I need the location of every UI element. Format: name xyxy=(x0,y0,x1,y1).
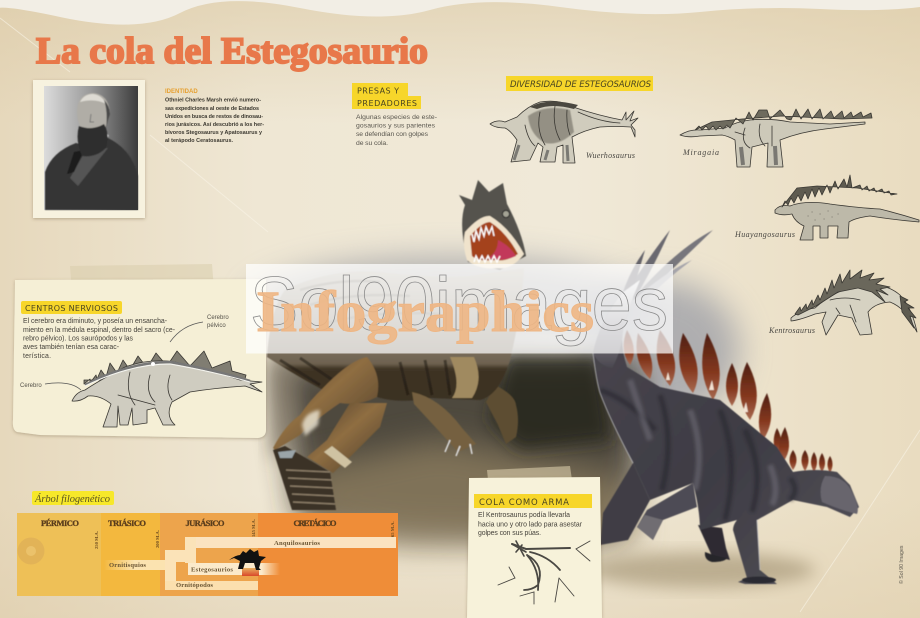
date labels xyxy=(94,519,395,549)
date labels: 250 M.A. xyxy=(94,531,99,549)
far hind leg xyxy=(600,463,650,545)
sketch: Wuerhosaurus xyxy=(490,101,638,163)
theropod far arm xyxy=(486,385,518,444)
name: Miragaia: Miragaia xyxy=(682,148,719,157)
label: cerebro: Cerebro xyxy=(20,383,42,389)
text block: kentrosaurus tail: El Kentrosaurus podía llevarla xyxy=(478,512,570,519)
name: Kentrosaurus: Kentrosaurus xyxy=(768,326,815,335)
panel: cola como arma xyxy=(467,477,602,618)
heading: diversidad de estegosaurios: DIVERSIDAD DE ESTEGOSAURIOS xyxy=(510,80,652,90)
branch labels xyxy=(109,540,320,589)
text block: cerebro: miento en la médula espinal, dentro del sacro (ce- xyxy=(23,327,175,334)
sketch: Stegosaurus with brain labels xyxy=(20,315,262,427)
name: Wuerhosaurus: Wuerhosaurus xyxy=(586,151,635,160)
branch labels: Estegosaurios xyxy=(191,566,233,574)
text block: kentrosaurus tail: golpes con sus púas. xyxy=(478,530,541,537)
tree branches xyxy=(104,537,396,590)
text block: cerebro: rebro pélvico). Los saurópodos y las xyxy=(23,336,134,342)
watermark: Sol90images and Infographics: Infographics xyxy=(256,279,594,344)
date labels: 65 M.A. xyxy=(390,521,395,537)
text block: cerebro: terística. xyxy=(23,353,51,360)
heading: centros nerviosos: CENTROS NERVIOSOS xyxy=(25,304,118,313)
heading: presas y predadores: PREDADORES xyxy=(357,99,417,108)
sketch: tail movement xyxy=(498,541,590,604)
heading: arbol filogenetico: Árbol filogenético xyxy=(34,493,110,505)
illustration: armoured stegosaur xyxy=(593,230,859,584)
period labels xyxy=(41,518,337,528)
portrait photo xyxy=(44,86,138,210)
tail spikes xyxy=(622,230,713,304)
chart: phylogenetic tree timeline xyxy=(17,513,398,596)
heading: presas y predadores: PRESAS Y xyxy=(357,86,399,96)
text block: cerebro: aves también tenían esa carac- xyxy=(23,344,119,351)
text block: presas y predadores: se defendían con golpes xyxy=(356,131,429,138)
illustration: theropod predator xyxy=(267,180,526,510)
branch labels: Anquilosaurios xyxy=(274,540,320,547)
branch labels: Ornitisquios xyxy=(109,562,146,569)
text block: identidad: bívoros Stegosaurus y Apatosaurus y xyxy=(165,130,262,136)
period labels: CRETÁCICO xyxy=(294,518,337,528)
panel: portrait of Othniel Charles Marsh xyxy=(33,80,145,218)
panel: centros nerviosos xyxy=(13,279,266,438)
heading: cola como arma: COLA COMO ARMA xyxy=(479,498,569,508)
theropod body xyxy=(267,268,524,401)
theropod foot xyxy=(273,446,336,510)
dorsal plates xyxy=(624,330,832,473)
stegosaur tail xyxy=(593,280,640,368)
watermark: Sol90images and Infographics: Sol90images xyxy=(250,262,668,347)
title: La cola del Estegosaurio xyxy=(36,31,428,72)
text block: presas y predadores: gosaurios y sus parientes xyxy=(356,122,436,130)
theropod head xyxy=(459,180,526,270)
date labels: 145 M.A. xyxy=(251,519,256,537)
label: cerebro pelvico: pélvico xyxy=(207,323,226,329)
stegosaur body xyxy=(593,280,859,584)
text block: presas y predadores: Algunas especies de este- xyxy=(356,114,437,121)
text block: kentrosaurus tail: hacia uno y otro lado para asestar xyxy=(478,522,583,528)
heading: centros nerviosos xyxy=(21,301,122,314)
tape on centros nerviosos xyxy=(70,264,214,292)
text block: identidad: al terápodo Ceratosaurus. xyxy=(165,138,234,144)
illustration: background scene xyxy=(250,257,815,588)
text block: presas y predadores: de su cola. xyxy=(356,140,388,147)
period labels: PÉRMICO xyxy=(41,518,79,528)
text block: cerebro: El cerebro era diminuto, y poseía un ensancha- xyxy=(23,318,167,325)
text block: identidad: Othniel Charles Marsh envió numero- xyxy=(165,98,261,104)
text block: identidad: IDENTIDAD xyxy=(165,89,198,95)
name: Huayangosaurus: Huayangosaurus xyxy=(734,230,795,239)
theropod shin xyxy=(307,403,387,473)
sketch: Kentrosaurus xyxy=(768,270,917,335)
stegosaur other foot xyxy=(705,552,727,562)
heading: cola como arma xyxy=(474,494,592,508)
text block: identidad: Unidos en busca de restos de dinosau- xyxy=(165,114,263,120)
text block: identidad xyxy=(165,89,265,144)
heading: presas y predadores xyxy=(352,83,421,109)
sketch: Miragaia xyxy=(680,109,872,167)
period labels: TRIÁSICO xyxy=(108,518,146,528)
far front leg xyxy=(698,525,730,560)
watermark band xyxy=(246,264,673,354)
sketch: Huayangosaurus xyxy=(734,175,919,240)
stegosaur raised foot xyxy=(637,483,697,540)
heading: diversidad de estegosaurios xyxy=(506,76,653,91)
icon: stegosaur silhouette xyxy=(229,549,266,570)
tape on cola como arma xyxy=(487,466,573,490)
credit: © Sol 90 Images xyxy=(898,545,905,584)
text block: identidad: rios jurásicos. Así descubrió a los her- xyxy=(165,122,264,128)
text block: identidad: sas expediciones al oeste de Estados xyxy=(165,106,259,112)
stegosaur shading xyxy=(600,390,795,520)
branch labels: Ornitópodos xyxy=(176,582,213,589)
period labels: JURÁSICO xyxy=(186,518,225,528)
icon: faded circle xyxy=(18,538,44,564)
theropod near arm xyxy=(412,392,476,452)
stegosaur head xyxy=(821,476,858,514)
theropod hind leg xyxy=(273,357,378,450)
label: cerebro pelvico: Cerebro xyxy=(207,315,229,321)
date labels: 200 M.A. xyxy=(155,530,160,548)
